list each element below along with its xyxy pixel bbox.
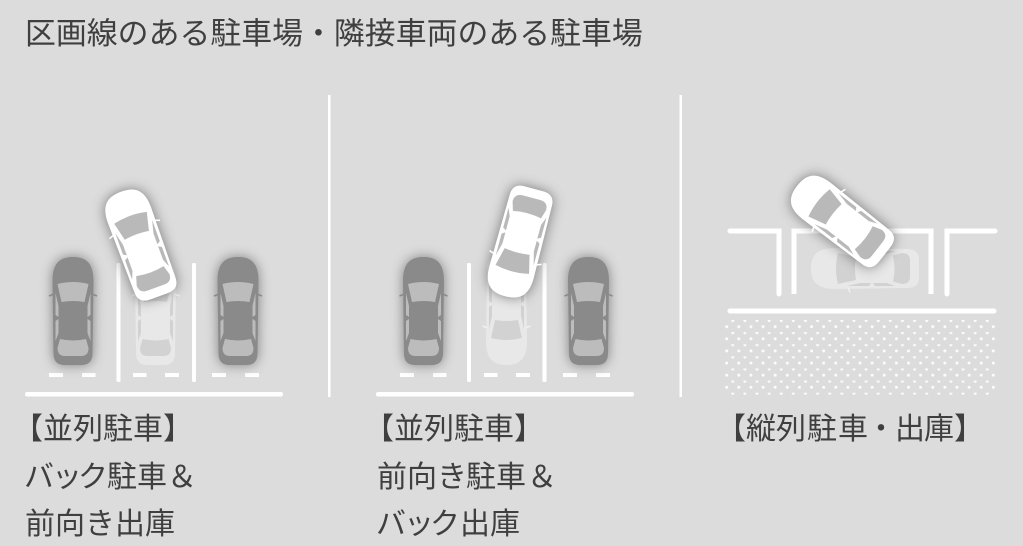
ghost car in target space [811,244,919,292]
caption 2: バック出庫 [376,508,520,541]
parked car right [214,257,262,365]
caption 2: 【並列駐車】 [364,413,544,446]
caption 3: 【縦列駐車・出庫】 [716,413,984,446]
ghost car in target space [132,257,180,365]
parking lines [730,231,995,311]
parked car left [400,257,448,365]
caption 1: バック駐車＆ [24,461,197,494]
divider [680,95,682,397]
panel: 縦列駐車 [725,165,997,395]
caption 1: 【並列駐車】 [13,413,193,446]
divider [328,95,330,397]
moving white car [96,183,184,305]
caption 2: 前向き駐車＆ [377,461,557,494]
parking lines [25,263,283,396]
parked car right [564,257,612,365]
dotted sidewalk [725,319,997,395]
moving white car [479,182,560,303]
caption 1 [13,413,197,541]
ghost car in target space [482,257,530,365]
title: 区画線のある駐車場・隣接車両のある駐車場 [25,16,643,51]
panel: 並列駐車 前向き駐車 [376,182,634,396]
caption 2 [364,413,557,541]
parking lines [376,263,634,396]
panel: 並列駐車 バック駐車 [25,183,283,396]
caption 1: 前向き出庫 [25,508,175,541]
moving white car [781,165,901,275]
parked car left [49,257,97,365]
